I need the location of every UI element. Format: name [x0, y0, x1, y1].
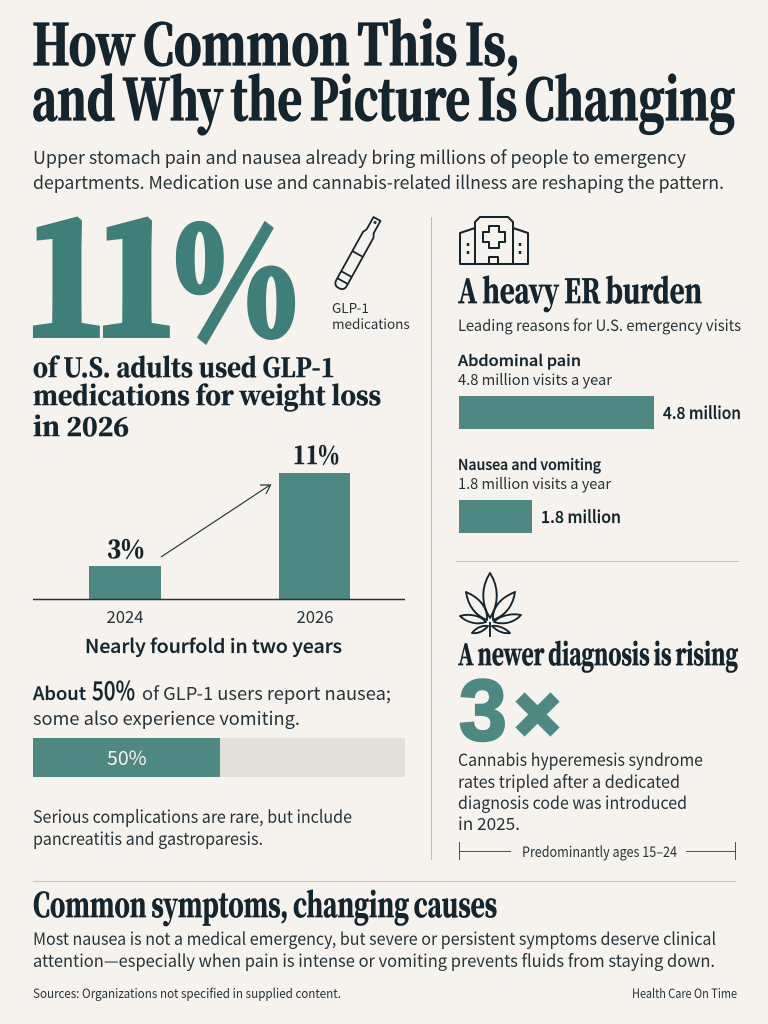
description: diagnosis code was introduced	[458, 789, 687, 814]
progress bar: 50%	[33, 738, 405, 777]
complications note: Serious complications are rare, but include	[33, 804, 352, 829]
section divider	[456, 560, 739, 562]
bar: abdominal pain	[458, 350, 741, 429]
nausea statement	[33, 671, 391, 731]
value label: 3%: 3%	[107, 530, 144, 566]
section divider	[33, 880, 736, 882]
nausea statement: 50%	[92, 671, 135, 708]
complications note	[33, 804, 352, 851]
nausea statement: About	[33, 680, 86, 706]
arrow	[161, 485, 270, 557]
axis label: 2026: 2026	[296, 603, 334, 628]
bar: nausea and vomiting	[458, 454, 621, 533]
subheading: Leading reasons for U.S. emergency visits	[458, 314, 741, 336]
column divider	[430, 217, 432, 860]
stat description: in 2026	[33, 407, 129, 444]
axis label: 2024: 2024	[106, 603, 144, 628]
big stat: 11%: 1	[95, 157, 177, 379]
icon: hospital	[460, 217, 528, 264]
icon label: GLP-1 medications: GLP-1	[332, 297, 369, 317]
title	[32, 2, 735, 137]
big stat: 11%: 1	[25, 157, 107, 379]
bar: nausea and vomiting: Nausea and vomiting	[458, 454, 601, 475]
body text: Most nausea is not a medical emergency, but severe or persistent symptoms deserve clinical	[33, 925, 716, 950]
value label: 11%: 11%	[293, 436, 339, 472]
bar: nausea and vomiting: 1.8 million visits a year	[458, 473, 611, 494]
big stat: 3x: 3	[459, 663, 507, 759]
bar: nausea and vomiting: 1.8 million	[541, 503, 621, 528]
stat description: medications for weight loss	[33, 376, 381, 413]
intro text	[33, 144, 724, 195]
chart caption: Nearly fourfold in two years	[85, 632, 342, 659]
description	[458, 746, 703, 835]
bar: abdominal pain: 4.8 million	[663, 399, 741, 424]
multiplication sign	[520, 697, 555, 732]
panel: ER burden	[458, 217, 741, 533]
bar chart: 2024 vs 2026	[33, 436, 405, 628]
panel: common symptoms	[33, 880, 716, 972]
nausea statement: some also experience vomiting.	[33, 705, 300, 731]
icon: cannabis leaf	[460, 573, 521, 637]
progress bar: 50%: 50%	[107, 742, 147, 771]
title: How Common This Is,	[32, 2, 520, 82]
complications note: pancreatitis and gastroparesis.	[33, 826, 263, 851]
bar: abdominal pain: 4.8 million visits a year	[458, 369, 612, 390]
intro text: Upper stomach pain and nausea already bring millions of people to emergency	[33, 144, 687, 170]
panel: cannabis diagnosis	[458, 573, 738, 862]
icon label: GLP-1 medications: medications	[332, 313, 410, 333]
age range bracket: Predominantly ages 15–24	[522, 841, 677, 862]
icon: injection pen	[333, 216, 382, 291]
big stat: 11%: %	[174, 167, 297, 377]
intro text: departments. Medication use and cannabis-related illness are reshaping the pattern.	[33, 169, 724, 195]
body text	[33, 925, 716, 972]
panel: GLP-1 use	[25, 157, 410, 851]
nausea statement: of GLP-1 users report nausea;	[142, 680, 391, 706]
sources: Sources: Organizations not specified in supplied content.	[33, 983, 341, 1002]
big stat: 11%	[25, 157, 297, 379]
description: in 2025.	[458, 810, 520, 835]
description: rates tripled after a dedicated	[458, 768, 680, 793]
age range bracket	[460, 841, 736, 862]
heading: Common symptoms, changing causes	[33, 880, 497, 927]
bar: abdominal pain: Abdominal pain	[458, 350, 581, 371]
stat description: of U.S. adults used GLP-1	[33, 348, 335, 385]
stat description	[33, 348, 381, 444]
body text: attention—especially when pain is intense or vomiting prevents fluids from staying down.	[33, 947, 715, 972]
description: Cannabis hyperemesis syndrome	[458, 746, 703, 771]
credit: Health Care On Time	[632, 983, 737, 1002]
